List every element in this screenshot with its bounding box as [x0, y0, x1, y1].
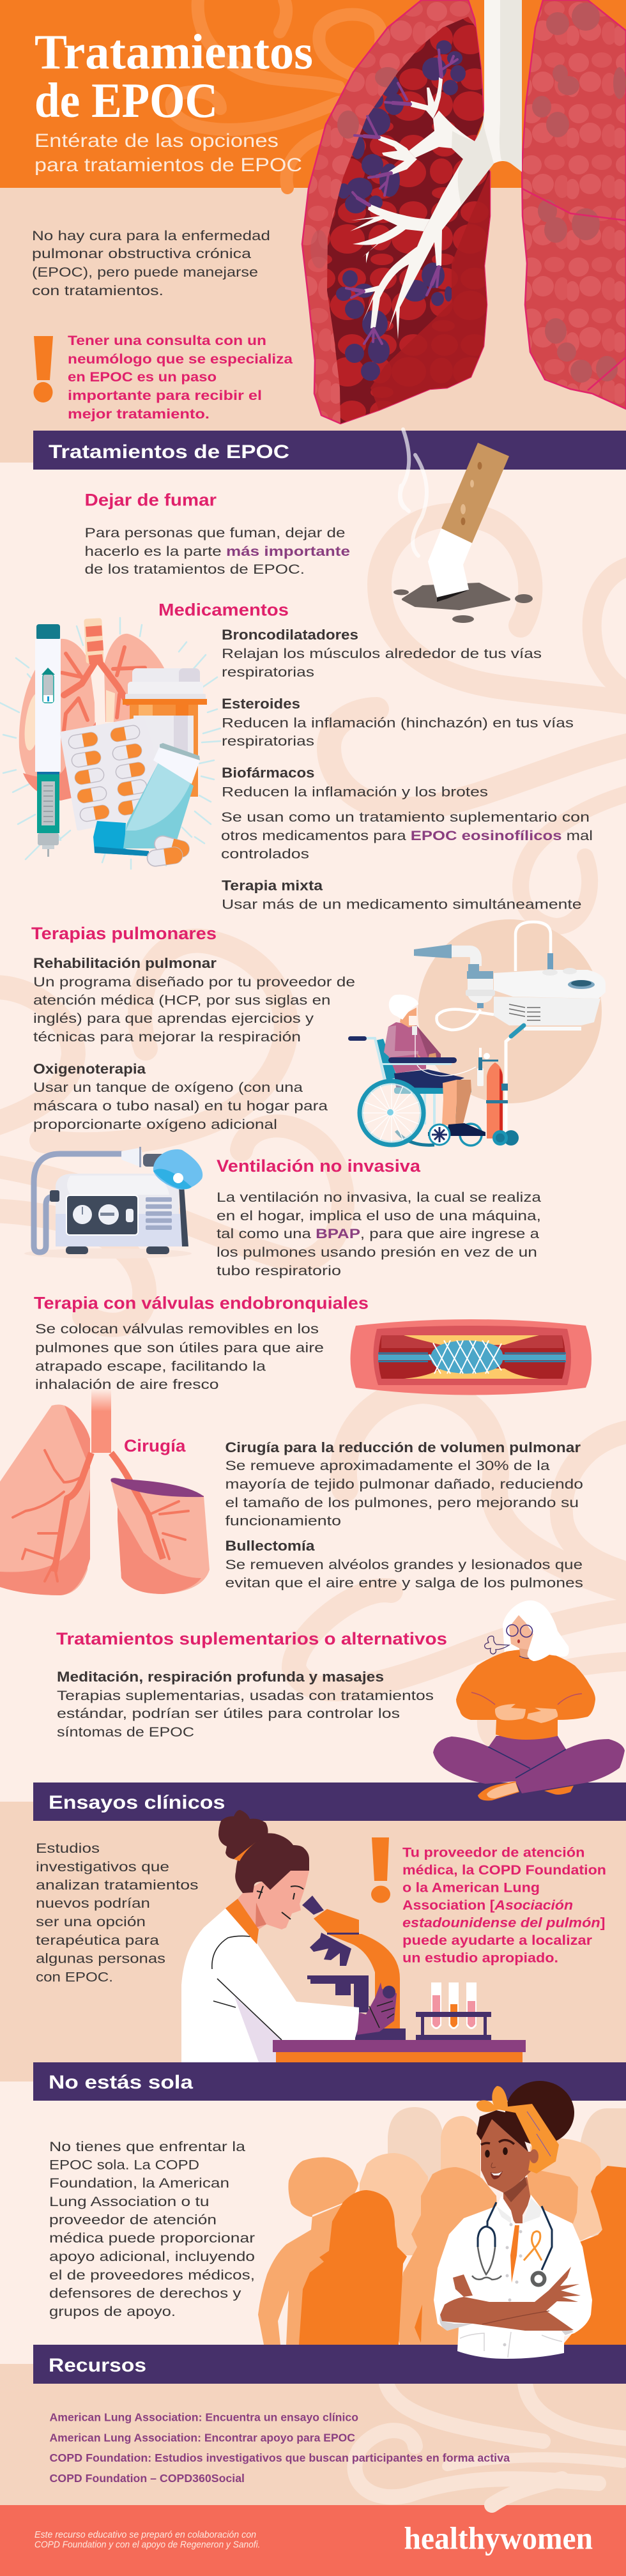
section bar: Ensayos clínicos: Ensayos clínicos: [49, 1792, 225, 1813]
callout: neumólogo: mejor tratamiento.: [68, 406, 210, 422]
callout: proveedor: estadounidense del pulmón ]: [402, 1915, 605, 1931]
section bar: No estás sola: No estás sola: [49, 2072, 193, 2093]
text: no estás sola: Lung Association o tu: [49, 2194, 210, 2209]
subtitle: para tratamientos de EPOC: [34, 155, 302, 176]
resource links: American Lung Association: Encuentra un ensayo clínico: [50, 2411, 358, 2424]
face: [481, 2118, 539, 2193]
pill bottle: [123, 668, 207, 797]
heading: Medicamentos: Medicamentos: [158, 601, 289, 620]
text: Biofármacos: Biofármacos: [222, 765, 314, 781]
icon: cigarette: [393, 429, 533, 623]
text: no estás sola: el de proveedores médicos,: [49, 2267, 255, 2283]
text: dejar de fumar: Para personas que fuman, dejar de: [84, 525, 345, 540]
text: estudios: analizan tratamientos: [36, 1877, 198, 1892]
text: meditación: estándar, podrían ser útiles para controlar los: [57, 1706, 400, 1721]
front light figures: [258, 2158, 578, 2345]
text: estudios: nuevos podrían: [36, 1896, 150, 1911]
text: estudios: con EPOC.: [36, 1969, 113, 1984]
rays: [0, 618, 220, 869]
hair behind: [503, 1600, 569, 1657]
text: reducción de volumen: Se remueve aproximadamente el 30% de la: [225, 1458, 550, 1473]
text: ventilación: en el hogar, implica el uso de una máquina,: [217, 1208, 541, 1223]
hair: [235, 1833, 309, 1893]
text: no estás sola: defensores de derechos y: [49, 2286, 241, 2301]
text: meditación: Terapias suplementarias, usadas con tratamientos: [57, 1688, 434, 1703]
text: Bullectomía: Se remueven alvéolos grandes y lesionados que: [225, 1557, 583, 1572]
section bar: Recursos: Recursos: [49, 2355, 146, 2376]
text: Rehabilitación pulmonar: [33, 955, 355, 1045]
text: Oxigenoterapia: Oxigenoterapia: [33, 1061, 146, 1077]
hair bun: [505, 2081, 574, 2145]
intro text: con tratamientos.: [32, 283, 164, 298]
text: ventilación: [217, 1190, 541, 1278]
text: Terapia mixta: [222, 878, 581, 912]
shadow under arms: [439, 2313, 574, 2335]
text: no estás sola: Foundation, la American: [49, 2175, 229, 2191]
text: Esteroides: Esteroides: [222, 696, 300, 712]
text: Rehabilitación pulmonar: técnicas para mejorar la respiración: [33, 1029, 301, 1045]
text: Rehabilitación pulmonar: inglés) para que aprendas ejercicios y: [33, 1011, 314, 1026]
text: Biofármacos: [221, 765, 593, 861]
hands: [495, 1704, 526, 1721]
text: estudios: [36, 1841, 198, 1984]
left lung inner tissue: [327, 17, 490, 424]
oxygen tank: [477, 1025, 524, 1146]
text: Bullectomía: [225, 1538, 583, 1591]
resource links: American Lung Association: Encontrar apoyo para EPOC: [50, 2432, 355, 2444]
glove: [357, 1982, 397, 2035]
logo: healthywomen: healthywomen: [404, 2520, 593, 2556]
desk: [273, 2040, 526, 2052]
facial features: [485, 2150, 490, 2158]
text: Oxigenoterapia: [33, 1061, 328, 1132]
text: no estás sola: médica puede proporcionar: [49, 2230, 255, 2246]
subtitle: Entérate de las opciones: [34, 130, 279, 151]
text: estudios: Estudios: [36, 1841, 100, 1856]
heading: Dejar de fumar: Dejar de fumar: [84, 491, 217, 510]
inhaler: [93, 743, 200, 867]
heading: Cirugía: Cirugía: [124, 1436, 186, 1455]
callout: proveedor: Association [ Asociación: [402, 1897, 573, 1913]
illustration: meditating woman: [433, 1600, 625, 1800]
callout: proveedor: o la American Lung: [402, 1880, 540, 1895]
callout: proveedor: puede ayudarte a localizar: [402, 1933, 593, 1948]
text: Bullectomía: Bullectomía: [225, 1538, 315, 1554]
illustration: doctor: [434, 2081, 592, 2359]
text: Esteroides: [222, 696, 574, 749]
text: Rehabilitación pulmonar: Un programa diseñado por tu proveedor de: [33, 974, 355, 990]
sweater: [456, 1650, 595, 1740]
callout: neumólogo: en EPOC es un paso: [68, 369, 217, 385]
illustration: lungs with bronchi: [302, 0, 626, 424]
callout: proveedor: [402, 1845, 606, 1965]
text: estudios: ser una opción: [36, 1914, 146, 1929]
left lung shell: [302, 0, 490, 424]
intro text: (EPOC), pero puede manejarse: [32, 264, 258, 280]
title: [34, 24, 313, 128]
front orange figures: [299, 2166, 626, 2345]
test tubes: [416, 1982, 491, 2040]
ribbon: [524, 2231, 542, 2260]
callout: neumólogo: neumólogo que se especializa: [68, 351, 293, 367]
text: estudios: algunas personas: [36, 1951, 165, 1966]
text: Oxigenoterapia: máscara o tubo nasal) en tu hogar para: [33, 1098, 328, 1114]
callout: proveedor: médica, la COPD Foundation: [402, 1862, 606, 1878]
text: válvulas: Se colocan válvulas removibles en los: [35, 1321, 319, 1337]
resource links: [50, 2411, 510, 2485]
intro text: No hay cura para la enfermedad: [32, 228, 270, 243]
section bar: No estás sola: [33, 2062, 626, 2101]
text: Biofármacos: otros medicamentos para EPOC eosinofílicos mal: [221, 828, 593, 843]
heading: Ventilación no invasiva: Ventilación no invasiva: [217, 1156, 420, 1176]
text: Rehabilitación pulmonar: atención médica (HCP, por sus siglas en: [33, 993, 331, 1008]
decorative body swirls: [0, 515, 626, 1712]
text: válvulas: [35, 1321, 324, 1392]
text: no estás sola: EPOC sola. La COPD: [49, 2157, 199, 2172]
text: ventilación: tal como una BPAP , para que aire ingrese a: [217, 1226, 539, 1241]
text: meditación: [57, 1669, 434, 1740]
face: [509, 1615, 533, 1650]
text: ventilación: La ventilación no invasiva, la cual se realiza: [217, 1190, 541, 1205]
recursos swirls: [355, 2384, 626, 2505]
far foot: [544, 1786, 574, 1795]
title: Tratamientos: [34, 24, 313, 79]
callout: neumólogo: [68, 333, 293, 422]
intro text: [32, 228, 270, 298]
heading: Terapias pulmonares: Terapias pulmonares: [31, 924, 217, 943]
neck: [503, 2177, 531, 2223]
text: ventilación: tubo respiratorio: [217, 1263, 341, 1278]
header swirls: [172, 0, 381, 188]
text: Broncodilatadores: Relajan los músculos alrededor de tus vías: [222, 646, 542, 661]
illustration: scientist with microscope: [181, 1810, 526, 2062]
left bronchial branches: [350, 77, 443, 263]
text: no estás sola: No tienes que enfrentar la: [49, 2139, 245, 2154]
greyed shell cells: [310, 67, 401, 268]
text: Broncodilatadores: Broncodilatadores: [222, 627, 358, 643]
callout: proveedor: Tu proveedor de atención: [402, 1845, 585, 1860]
face: [225, 1871, 309, 1944]
text: no estás sola: proveedor de atención: [49, 2212, 217, 2227]
footer credit: COPD Foundation y con el apoyo de Regeneron y Sanofi.: [34, 2540, 261, 2550]
section bar: Ensayos clínicos: [33, 1782, 626, 1821]
text: reducción de volumen: [225, 1439, 583, 1528]
heading: Tratamientos suplementarios: Tratamientos suplementarios o alternativos: [56, 1629, 447, 1648]
near foot: [478, 1781, 519, 1800]
text: Biofármacos: Se usan como un tratamiento suplementario con: [221, 809, 590, 825]
headband: [492, 2104, 559, 2174]
text: estudios: terapéutica para: [36, 1933, 159, 1948]
trachea and main bronchi: [363, 0, 522, 339]
icon: exclamation mark: [33, 336, 53, 402]
text: no estás sola: [49, 2139, 255, 2319]
microscope: [302, 1896, 406, 2040]
section bar: Tratamientos de EPOC: Tratamientos de EPOC: [49, 441, 289, 463]
purple bronchiole tips: [346, 50, 457, 344]
illustration: surgery lungs: [0, 1389, 210, 1595]
text: dejar de fumar: de los tratamientos de EPOC.: [84, 562, 305, 577]
injector pen: [35, 624, 61, 857]
coat details: [496, 2198, 542, 2223]
text: ventilación: los pulmones usando presión en vez de un: [217, 1245, 537, 1260]
lungs: [19, 639, 96, 801]
text: Biofármacos: Reducen la inflamación y los brotes: [222, 785, 488, 800]
text: meditación: síntomas de EPOC: [57, 1724, 194, 1740]
text: Broncodilatadores: respiratorias: [222, 664, 314, 680]
callout: neumólogo: importante para recibir el: [68, 388, 262, 403]
right lung: [522, 0, 626, 409]
coat: [434, 2195, 592, 2359]
resource links: COPD Foundation: Estudios investigativos que buscan participantes en forma activa: [50, 2451, 510, 2464]
text: Bullectomía: evitan que el aire entre y salga de los pulmones: [225, 1575, 583, 1591]
intro text: pulmonar obstructiva crónica: [32, 246, 251, 261]
glasses: [507, 1625, 533, 1637]
text: Esteroides: respiratorias: [222, 733, 314, 749]
illustration: endobronchial valve: [350, 1319, 592, 1395]
hair front: [477, 2110, 528, 2152]
text: Biofármacos: controlados: [221, 846, 309, 861]
big wheel: [360, 1081, 450, 1145]
text: Broncodilatadores: [222, 627, 542, 680]
text: Terapia mixta: Terapia mixta: [222, 878, 323, 893]
illustration: support crowd: [258, 2107, 626, 2345]
section bar: Recursos: [33, 2345, 626, 2384]
damaged purple alveoli: [336, 40, 466, 381]
heading: Terapia con válvulas: Terapia con válvulas endobronquiales: [34, 1293, 369, 1312]
lower right shaded tissue: [370, 172, 490, 410]
illustration: medications: [0, 618, 220, 869]
legs: [433, 1736, 625, 1793]
stethoscope: [478, 2202, 496, 2247]
footer credit: [34, 2530, 261, 2550]
text: Rehabilitación pulmonar: Rehabilitación pulmonar: [33, 955, 217, 971]
text: dejar de fumar: hacerlo es la parte más importante: [84, 544, 350, 559]
illustration: wheelchair and nebulizer: [348, 919, 606, 1146]
middle row: [358, 2116, 603, 2255]
back row: [388, 2107, 626, 2236]
coat: [181, 1908, 359, 2062]
text: reducción de volumen: mayoría de tejido pulmonar dañado, reduciendo: [225, 1476, 583, 1492]
text: meditación: Meditación, respiración profunda y masajes: [57, 1669, 384, 1685]
trachea shading: [452, 0, 522, 204]
text: Terapia mixta: Usar más de un medicamento simultáneamente: [222, 897, 581, 912]
text: reducción de volumen: funcionamiento: [225, 1513, 341, 1528]
back shade: [477, 1719, 496, 1747]
hair front: [519, 1613, 569, 1661]
text: Oxigenoterapia: proporcionarte oxígeno adicional: [33, 1117, 277, 1132]
callout: proveedor: un estudio apropiado.: [402, 1950, 558, 1965]
illustration: BPAP machine: [24, 1147, 202, 1259]
nebulizer: [414, 922, 606, 1031]
subtitle: [34, 130, 302, 176]
footer credit: Este recurso educativo se preparó en colaboración con: [34, 2530, 256, 2540]
text: válvulas: atrapado escape, facilitando la: [35, 1358, 266, 1374]
title: de EPOC: [34, 73, 218, 128]
text: reducción de volumen: Cirugía para la reducción de volumen pulmonar: [225, 1439, 581, 1455]
section bar: Tratamientos de EPOC: [33, 431, 626, 470]
icon: exclamation mark: [371, 1837, 390, 1903]
text: dejar de fumar: [84, 525, 350, 577]
text: estudios: investigativos que: [36, 1859, 169, 1874]
text: Oxigenoterapia: Usar un tanque de oxígeno (con una: [33, 1080, 303, 1095]
seated person: [381, 995, 485, 1136]
blister pack: [62, 719, 160, 829]
text: no estás sola: apoyo adicional, incluyendo: [49, 2249, 255, 2264]
text: válvulas: pulmones que son útiles para que aire: [35, 1340, 324, 1356]
crossed arms: [440, 2267, 581, 2331]
resource links: COPD Foundation – COPD360Social: [50, 2472, 245, 2485]
text: reducción de volumen: el tamaño de los pulmones, pero mejorando su: [225, 1495, 579, 1510]
text: no estás sola: grupos de apoyo.: [49, 2304, 176, 2319]
callout: neumólogo: Tener una consulta con un: [68, 333, 266, 348]
text: Esteroides: Reducen la inflamación (hinchazón) en tus vías: [222, 716, 574, 731]
wheelchair: [348, 1036, 482, 1146]
text: válvulas: inhalación de aire fresco: [35, 1377, 219, 1392]
